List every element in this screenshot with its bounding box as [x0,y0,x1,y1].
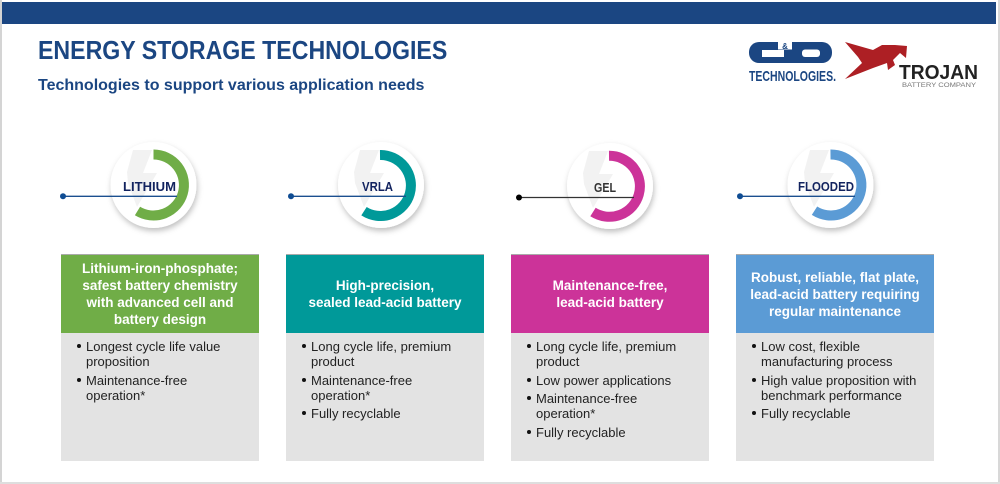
right edge rule [998,0,1000,484]
lithium heading: safest battery chemistry [82,278,238,293]
flooded heading: Robust, reliable, flat plate, [751,270,919,284]
flooded heading [736,254,934,333]
gel features: Maintenance-free [536,391,637,406]
lithium features: operation* [86,388,145,402]
VRLA features: Maintenance-free [311,372,412,388]
icon: VRLA badge [288,142,424,228]
panel: VRLA [286,254,484,461]
icon: lithium badge [60,142,196,228]
logo: Trojan Battery Company: TROJAN [899,62,978,84]
logo: C&D Technologies [749,41,836,85]
lithium heading: Lithium-iron-phosphate; [82,261,238,276]
lithium features: Maintenance-free [86,372,187,388]
VRLA features: Fully recyclable [311,406,401,421]
panel: flooded [736,254,934,461]
VRLA heading: sealed lead-acid battery [308,295,462,310]
logo: Trojan Battery Company: BATTERY COMPANY [902,82,977,89]
flooded heading: regular maintenance [769,304,901,318]
VRLA features: product [311,354,354,369]
bottom edge rule [0,482,1000,484]
icon: VRLA badge: VRLA [362,179,394,194]
subtitle: Technologies to support various application needs [38,77,424,94]
gel features: product [536,354,579,369]
logo: C&D Technologies: TECHNOLOGIES. [749,68,836,85]
lithium heading [61,254,259,333]
flooded features: High value proposition with [761,372,916,388]
gel features [511,333,709,461]
VRLA heading [286,254,484,333]
flooded features: Fully recyclable [761,406,851,421]
flooded heading: lead-acid battery requiring [750,286,920,302]
VRLA heading: High-precision, [336,278,434,293]
lithium features: Longest cycle life value [86,339,220,354]
title: ENERGY STORAGE TECHNOLOGIES [38,35,447,65]
icon: gel badge [516,143,653,229]
flooded features: benchmark performance [761,388,902,402]
lithium heading: battery design [114,312,206,327]
gel features: Long cycle life, premium [536,339,676,354]
gel features: Low power applications [536,372,671,388]
logo: C&D Technologies: & [782,42,788,51]
flooded features: Low cost, flexible [761,339,860,354]
lithium features [61,333,259,461]
gel heading: lead-acid battery [556,295,664,310]
gel heading: Maintenance-free, [553,278,667,293]
flooded features: manufacturing process [761,354,893,369]
panel: lithium [61,254,259,461]
VRLA features: operation* [311,388,370,402]
flooded features [736,333,934,461]
icon: gel badge: GEL [594,180,616,195]
VRLA features [286,333,484,461]
top banner [2,2,996,24]
slide frame [0,0,2,484]
panel: gel [511,254,709,461]
gel features: Fully recyclable [536,424,626,440]
gel features: operation* [536,406,595,421]
gel heading [511,254,709,333]
logo: Trojan Battery Company [845,42,978,89]
icon: lithium badge: LITHIUM [123,179,176,194]
lithium heading: with advanced cell and [86,295,234,310]
lithium features: proposition [86,354,150,369]
icon: flooded badge: FLOODED [798,179,854,194]
VRLA features: Long cycle life, premium [311,339,451,354]
icon: flooded badge [737,142,874,228]
